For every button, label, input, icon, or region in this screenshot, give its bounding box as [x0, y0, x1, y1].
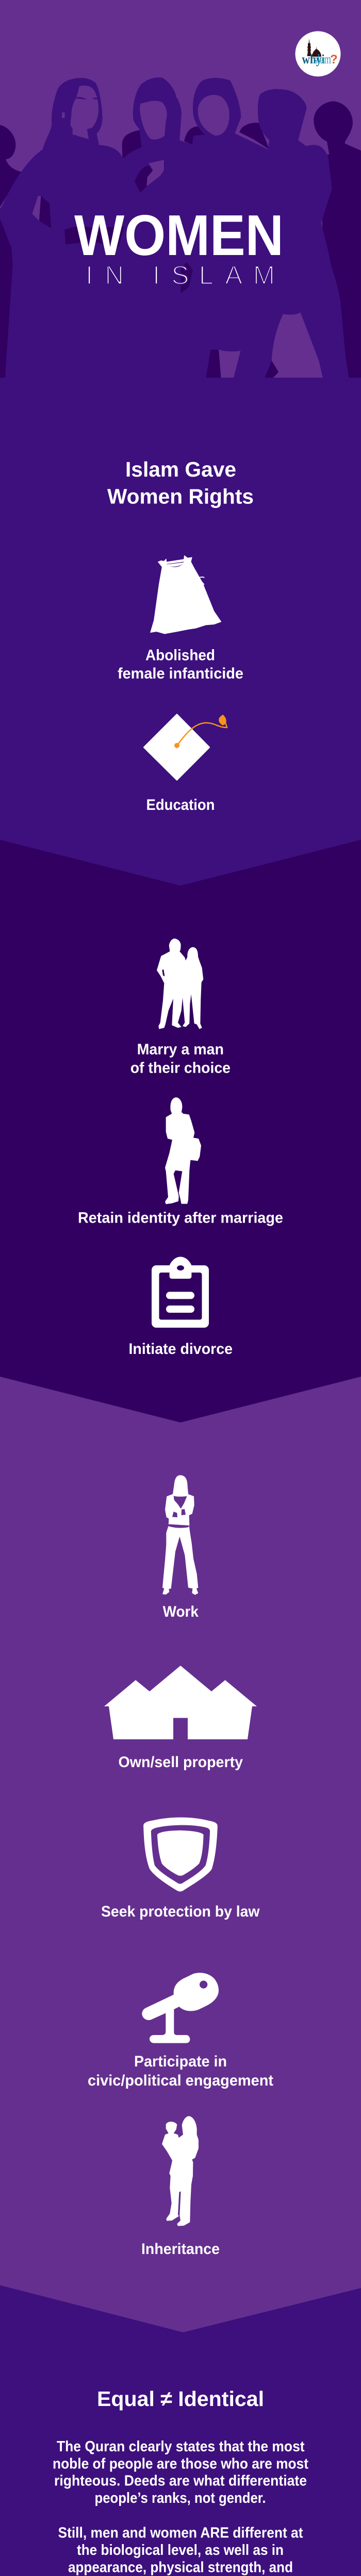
- label: marry a man of their choice: [130, 1041, 231, 1076]
- label: abolished female infanticide: female infanticide: [118, 665, 243, 682]
- heading: Islam Gave Women Rights: Islam Gave: [125, 457, 236, 481]
- text block: the Quran clearly states: noble of people are those who are most: [53, 2455, 308, 2472]
- title: WOMEN: WOMEN: [74, 204, 284, 267]
- icon: woman with bag: [165, 1097, 201, 1204]
- label: inheritance: Inheritance: [141, 2241, 220, 2258]
- logo: whyislam: whyi: [302, 53, 325, 66]
- label: abolished female infanticide: [118, 647, 243, 682]
- text block: men and women are different: Still, men and women ARE different at: [58, 2524, 303, 2541]
- panel: hero: [0, 0, 361, 378]
- label: initiate divorce: Initiate divorce: [129, 1341, 233, 1358]
- label: participate in civic/political engagement: civic/political engagement: [88, 2072, 273, 2089]
- text block: the Quran clearly states: [53, 2438, 308, 2506]
- label: education: Education: [146, 796, 215, 814]
- label: own/sell property: Own/sell property: [119, 1754, 243, 1771]
- text block: men and women are different: [53, 2524, 308, 2576]
- label: seek protection by law: Seek protection by law: [101, 1903, 260, 1920]
- icon: shield: [143, 1817, 218, 1891]
- icon: couple silhouette: [157, 939, 203, 1029]
- panel: purple section background: [0, 1340, 361, 2332]
- icon: graduation cap: [144, 715, 227, 780]
- heading: Islam Gave Women Rights: [107, 457, 254, 508]
- heading: Equal not identical: Equal ≠ Identical: [97, 2387, 264, 2411]
- panel: dark section background: [0, 840, 361, 1422]
- logo: whyislam: ?: [330, 53, 338, 66]
- text block: men and women are different: appearance, physical strength, and: [68, 2560, 293, 2576]
- logo: whyislam: slam: [314, 53, 331, 66]
- label: marry a man of their choice: Marry a man: [137, 1041, 224, 1058]
- hero illustration: silhouettes of women: [0, 77, 361, 378]
- icon: baby dress: [150, 555, 221, 634]
- text block: men and women are different: the biological level, as well as in: [77, 2542, 284, 2558]
- icon: mother and child: [162, 2116, 199, 2226]
- text block: the Quran clearly states: righteous. Deeds are what differentiate: [54, 2472, 307, 2489]
- subtitle: IN ISLAM: IN ISLAM: [86, 260, 275, 290]
- label: participate in civic/political engagement: Participate in: [134, 2053, 227, 2070]
- icon: clipboard: [152, 1257, 209, 1328]
- label: retain identity after marriage: Retain identity after marriage: [78, 1210, 283, 1226]
- text block: the Quran clearly states: The Quran clearly states that the most: [57, 2438, 305, 2455]
- label: abolished female infanticide: Abolished: [145, 647, 215, 664]
- logo: whyislam: [295, 31, 340, 76]
- label: participate in civic/political engagement: [88, 2053, 273, 2089]
- heading: Islam Gave Women Rights: Women Rights: [107, 484, 254, 508]
- label: work: Work: [163, 1603, 199, 1620]
- icon: microphone: [142, 1973, 219, 2043]
- icon: houses: [104, 1666, 257, 1739]
- text block: the Quran clearly states: people’s ranks, not gender.: [95, 2490, 266, 2506]
- icon: working woman: [162, 1475, 198, 1595]
- label: marry a man of their choice: of their choice: [130, 1059, 231, 1076]
